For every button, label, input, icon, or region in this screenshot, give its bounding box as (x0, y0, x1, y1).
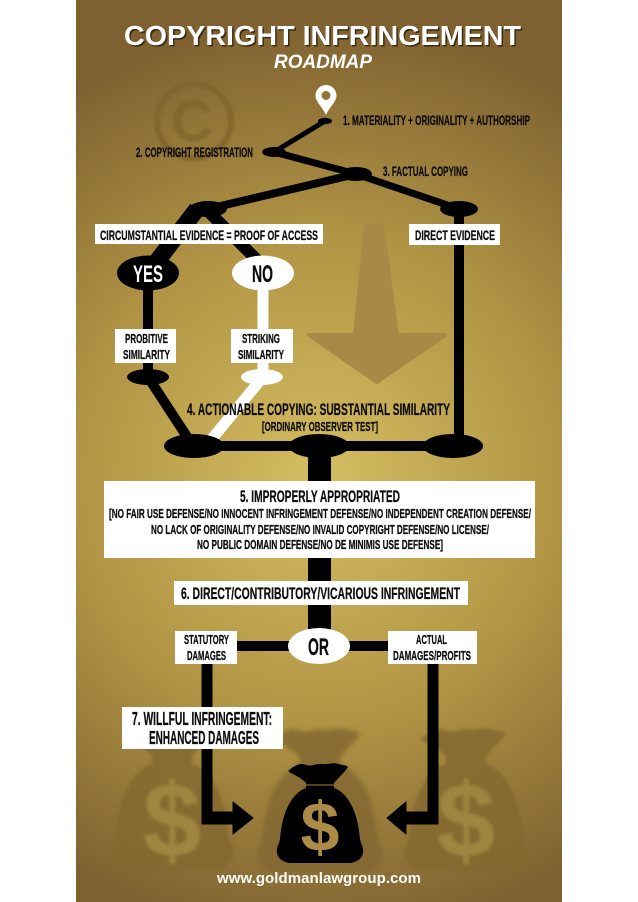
node 3 (340, 167, 372, 181)
label: step 2: 2. COPYRIGHT REGISTRATION (136, 145, 253, 160)
icon: money bag: $ (301, 788, 339, 866)
label: direct evidence (409, 224, 500, 245)
actionable copying connector (194, 441, 453, 451)
label: actual damages: ACTUAL (416, 632, 447, 647)
no node (232, 256, 294, 290)
watermark: right money bag: $ (437, 762, 495, 879)
location pin icon (316, 85, 336, 115)
node 2 (262, 147, 286, 157)
panel: step 5 improperly appropriated (104, 481, 535, 558)
panel: step 5 improperly appropriated: 5. IMPROPERLY APPROPRIATED (240, 487, 400, 506)
subtitle: ROADMAP (274, 51, 373, 73)
node: direct (440, 201, 478, 217)
main trunk connector (308, 446, 331, 636)
website url: www.goldmanlawgroup.com (216, 870, 421, 887)
label: step 3: 3. FACTUAL COPYING (383, 164, 468, 179)
node: bottom center (289, 434, 349, 458)
panel: step 7 willful infringement: 7. WILLFUL INFRINGEMENT: (132, 709, 272, 729)
no branch connector (206, 273, 263, 446)
yes branch connector (148, 273, 193, 446)
label: striking similarity (231, 329, 293, 363)
label: step 4: [ORDINARY OBSERVER TEST] (262, 420, 378, 434)
label: direct evidence: DIRECT EVIDENCE (415, 227, 495, 243)
yes node (117, 256, 179, 290)
panel: step 5 improperly appropriated: NO PUBLIC DOMAIN DEFENSE/NO DE MINIMIS USE DEFENSE] (197, 537, 443, 552)
label: circumstantial evidence (95, 224, 323, 244)
panel: step 7 willful infringement (122, 707, 283, 749)
panel: step 7 willful infringement: ENHANCED DAMAGES (149, 728, 259, 748)
yes node: YES (133, 261, 163, 288)
node: probitive (127, 369, 169, 385)
watermark: left money bag: $ (143, 762, 201, 879)
upper roadmap connectors (148, 121, 459, 273)
label: step 4 (187, 400, 450, 434)
direct evidence connector (454, 209, 464, 446)
damages connector (207, 641, 432, 651)
label: statutory damages: STATUTORY (184, 632, 229, 647)
node: circumstantial (189, 201, 227, 217)
node: striking (241, 369, 283, 385)
label: striking similarity: STRIKING (242, 331, 280, 346)
node: bottom left (164, 434, 224, 458)
label: probitive similarity: SIMILARITY (123, 347, 170, 362)
right damages connector with arrow (387, 664, 438, 834)
no node: NO (252, 261, 273, 288)
watermark: copyright symbol: C (171, 89, 213, 154)
label: actual damages: DAMAGES/PROFITS (393, 648, 471, 663)
watermark: left money bag (111, 728, 233, 879)
or node (288, 628, 350, 664)
label: probitive similarity (115, 329, 176, 363)
node: bottom right (423, 434, 483, 458)
label: actual damages (388, 631, 477, 664)
icon: money bag (277, 763, 363, 866)
panel: step 6 infringement types (174, 581, 468, 605)
title: COPYRIGHT INFRINGEMENT (126, 22, 522, 52)
background panel (76, 0, 562, 902)
label: statutory damages: DAMAGES (187, 648, 226, 663)
watermark: center money bag (257, 728, 383, 873)
watermark: large down arrow (309, 225, 445, 382)
label: statutory damages (175, 631, 237, 664)
label: probitive similarity: PROBITIVE (125, 331, 168, 346)
label: circumstantial evidence: CIRCUMSTANTIAL EVIDENCE = PROOF OF ACCESS (100, 227, 318, 243)
label: step 4: 4. ACTIONABLE COPYING: SUBSTANTIAL SIMILARITY (187, 400, 450, 419)
watermark: right money bag (405, 728, 527, 879)
label: striking similarity: SIMILARITY (238, 347, 284, 362)
title: COPYRIGHT INFRINGEMENT (124, 20, 521, 51)
left damages connector with arrow (202, 664, 253, 834)
watermark: copyright symbol (157, 84, 231, 158)
node 1 (318, 118, 332, 124)
panel: step 6 infringement types: 6. DIRECT/CONTRIBUTORY/VICARIOUS INFRINGEMENT (181, 584, 460, 603)
or node: OR (308, 634, 329, 661)
